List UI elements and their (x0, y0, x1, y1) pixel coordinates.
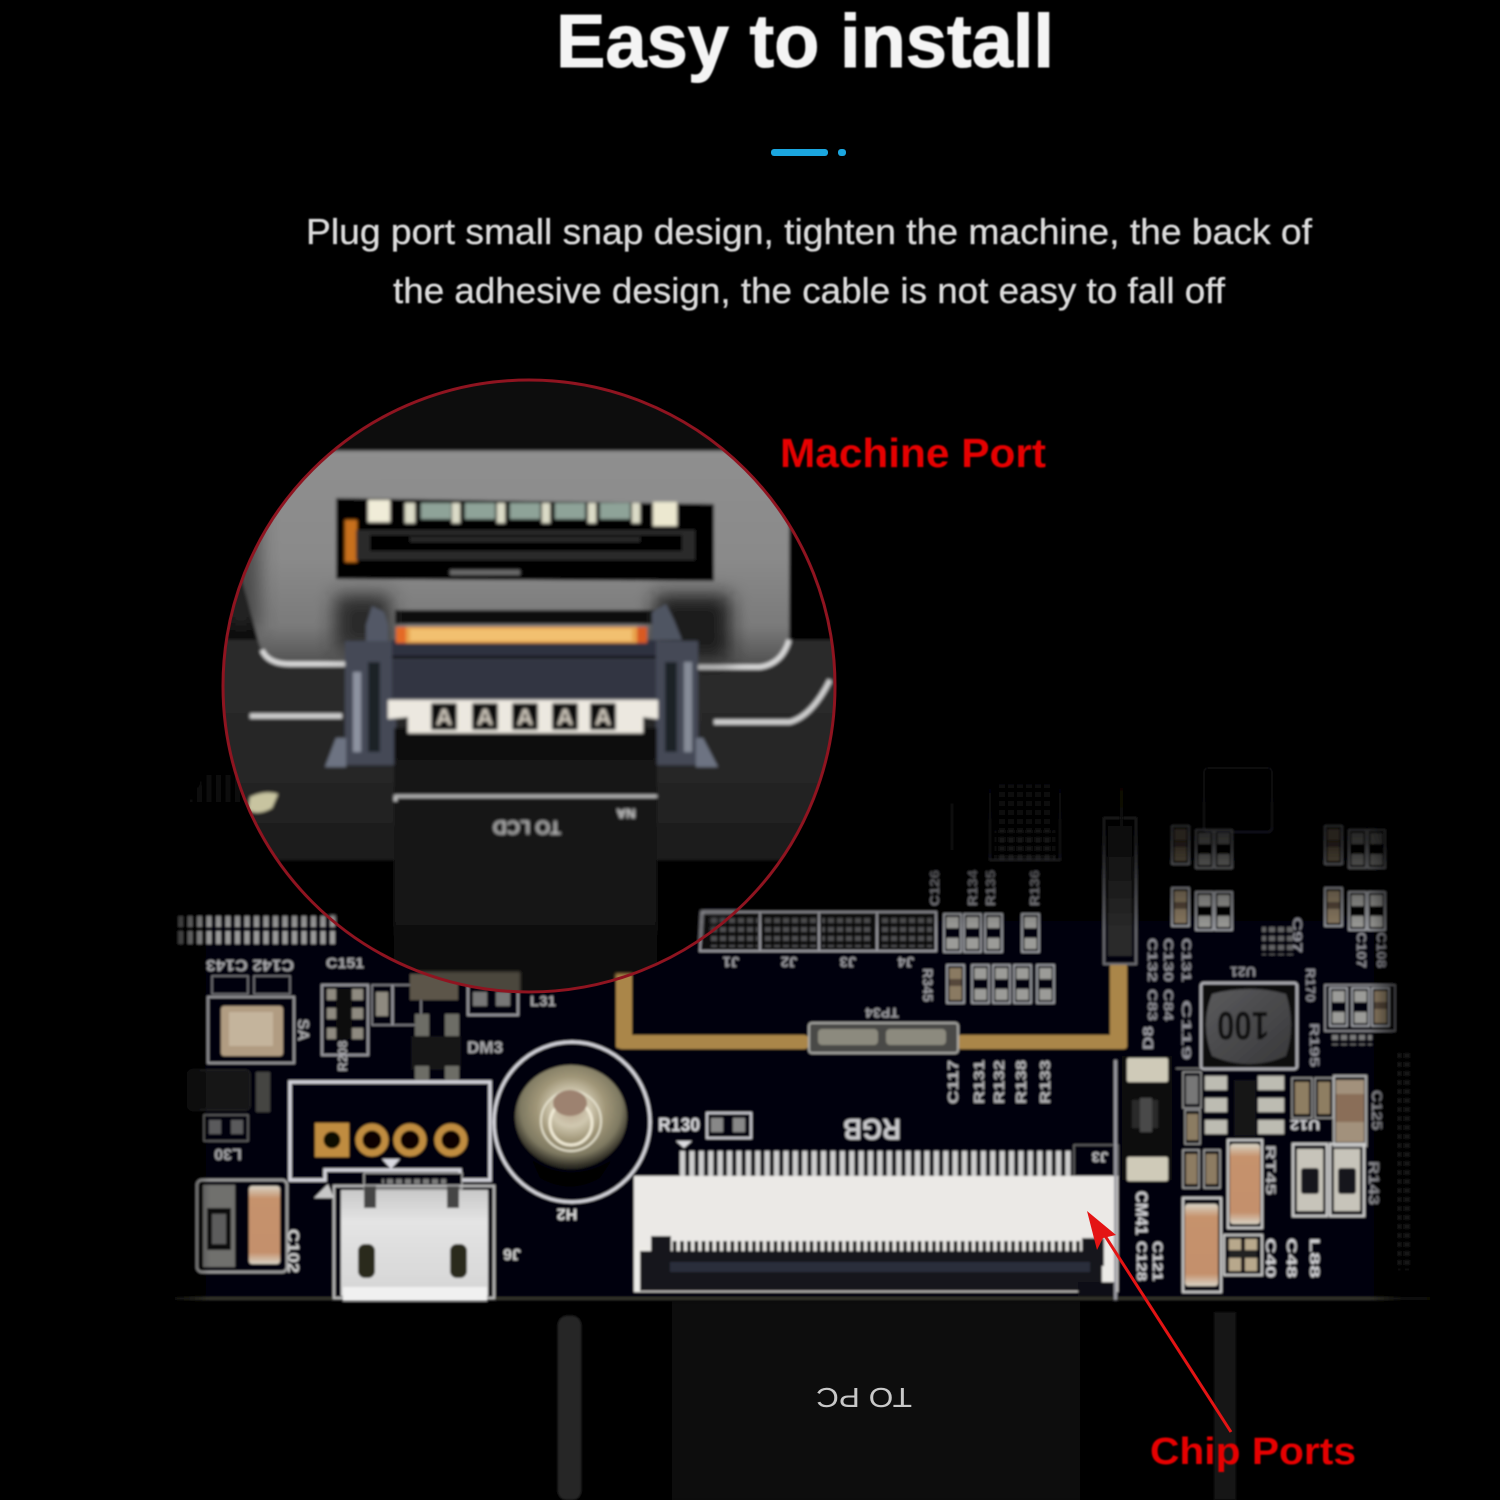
RGB label: RGB (843, 1112, 901, 1145)
edge fades (160, 735, 1452, 1305)
4-pin header footprint (290, 1082, 490, 1198)
small text clusters: D8 (1140, 1026, 1157, 1050)
power stage components (1176, 1050, 1410, 1292)
silkscreen labels bottom right: C121 (1150, 1241, 1166, 1281)
board bottom edge (175, 1297, 1445, 1300)
silkscreen labels left: C102 (284, 1229, 301, 1273)
mid chips row: J4 (897, 953, 914, 970)
silkscreen labels bottom right (1132, 1090, 1385, 1281)
small text clusters: R170 (1303, 968, 1318, 1002)
resistor labels: R132 (991, 1060, 1008, 1104)
small text clusters: C97 (1290, 917, 1305, 953)
silkscreen labels bottom right: C48 (1284, 1238, 1300, 1278)
inner rectangular gold trace (616, 964, 1127, 1049)
white pull tab with letters: A (557, 704, 573, 730)
TO PC label: TO PC (816, 1382, 912, 1413)
board base (172, 745, 1440, 1301)
label: machine port: Machine Port (780, 430, 1046, 476)
mounting screw (494, 1042, 650, 1202)
silkscreen labels left: J6 (503, 1245, 521, 1262)
silkscreen labels left: L30 (214, 1145, 242, 1162)
R130 footprint (658, 1113, 751, 1148)
large black component with white pads (1122, 1056, 1172, 1181)
mid chips row: R134 (965, 869, 980, 906)
mid chips row: J2 (781, 953, 797, 970)
inductor: 100 (1217, 1003, 1269, 1047)
micro USB connector (334, 1173, 494, 1301)
chip port FPC connector (634, 1060, 1118, 1300)
connector shadows (395, 610, 655, 624)
mid chips row (700, 869, 1054, 1003)
silkscreen labels bottom right: C128 (1134, 1241, 1150, 1281)
cap and resistor bottom left (197, 1180, 287, 1272)
title: Easy to install (556, 0, 1054, 83)
white pull tab with letters: A (436, 704, 452, 730)
silkscreen labels bottom right: C125 (1368, 1090, 1385, 1130)
white pull tab with letters: A (517, 704, 533, 730)
cable and wires below the board (200, 1302, 1400, 1500)
circuit board photo (160, 735, 1452, 1500)
white pull tab with letters: A (595, 704, 611, 730)
resistor labels (945, 1060, 1054, 1104)
dark top area (340, 382, 718, 448)
silkscreen labels left: H2 (557, 1205, 577, 1222)
transistor (411, 1014, 461, 1080)
small text clusters: R195 (1307, 1023, 1322, 1067)
silkscreen labels bottom right: CM41 (1132, 1191, 1151, 1235)
inductor (1201, 983, 1297, 1069)
arrow pointing to chip port (1087, 1211, 1231, 1432)
mid chips row: R136 (1027, 870, 1042, 906)
white pull tab with letters (388, 700, 658, 733)
resistor labels: R133 (1037, 1060, 1054, 1104)
upper left comb rows (178, 772, 338, 944)
silkscreen labels left: C151 (326, 955, 364, 972)
small text clusters: C83 (1145, 989, 1160, 1021)
TP34 component (809, 1005, 958, 1053)
plate side shading (228, 528, 270, 639)
NA label: NA (616, 806, 635, 821)
TP34 component: TP34 (865, 1005, 899, 1021)
small text clusters: C131 (1179, 938, 1194, 982)
mid chips row: R135 (983, 870, 998, 906)
TO LCD label: TO LCD (493, 817, 561, 837)
R130 footprint: R130 (658, 1115, 700, 1135)
crystal (208, 976, 294, 1063)
small text clusters: C108 (1374, 932, 1389, 968)
mid chips row: R345 (920, 968, 936, 1002)
dim part left (188, 1070, 270, 1141)
small text clusters: C119 (1179, 1000, 1194, 1060)
resistor labels: C117 (945, 1060, 962, 1104)
mid chips row: J3 (840, 953, 856, 970)
silkscreen labels bottom right: C40 (1263, 1238, 1279, 1278)
small text clusters (1140, 917, 1389, 1067)
small text clusters: C130 (1161, 938, 1176, 982)
small text clusters: C107 (1354, 932, 1369, 968)
silkscreen labels left: L31 (530, 993, 556, 1010)
port slot (336, 498, 714, 581)
description text (306, 211, 1313, 311)
left small pads (322, 974, 518, 1055)
mid chips row: J1 (723, 953, 739, 970)
chip port FPC connector: J3 (1092, 1148, 1108, 1165)
small text clusters: C84 (1161, 989, 1176, 1022)
silkscreen labels left (206, 955, 577, 1273)
mid chips row: C126 (927, 870, 942, 906)
resistor labels: R131 (971, 1060, 988, 1104)
silkscreen labels bottom right: U12 (1290, 1116, 1320, 1133)
lens backdrop (228, 525, 794, 642)
cable (394, 728, 657, 1000)
orange contacts (396, 627, 647, 643)
silkscreen labels left: C142 C143 (206, 956, 294, 973)
silkscreen labels left: SA (294, 1019, 311, 1042)
lens red ring (223, 380, 835, 992)
silkscreen labels left: DM3 (467, 1038, 503, 1057)
silkscreen labels bottom right: R143 (1365, 1161, 1382, 1205)
resistor labels: R138 (1013, 1060, 1030, 1104)
plate highlight lines (250, 640, 830, 722)
silkscreen labels left: R208 (335, 1040, 350, 1072)
magnified circle: machine port (222, 378, 836, 994)
board seen through lens: C151 (326, 955, 360, 971)
description text: Plug port small snap design, tighten the machine, the back of (306, 211, 1313, 252)
label: chip ports: Chip Ports (1150, 1431, 1356, 1473)
dim upper right components (952, 745, 1432, 1090)
small text clusters: C132 (1145, 938, 1160, 982)
silver port plate (226, 451, 789, 665)
lower body (222, 640, 836, 860)
description text: the adhesive design, the cable is not easy to fall off (393, 270, 1226, 311)
silkscreen labels bottom right: L88 (1307, 1238, 1323, 1278)
small text clusters: U21 (1230, 964, 1256, 980)
white pull tab with letters: A (477, 704, 493, 730)
accent divider: cyan bar and dot (771, 149, 846, 156)
board seen through lens (246, 790, 738, 990)
silkscreen labels bottom right: RT45 (1263, 1145, 1279, 1195)
connector body (325, 604, 718, 767)
